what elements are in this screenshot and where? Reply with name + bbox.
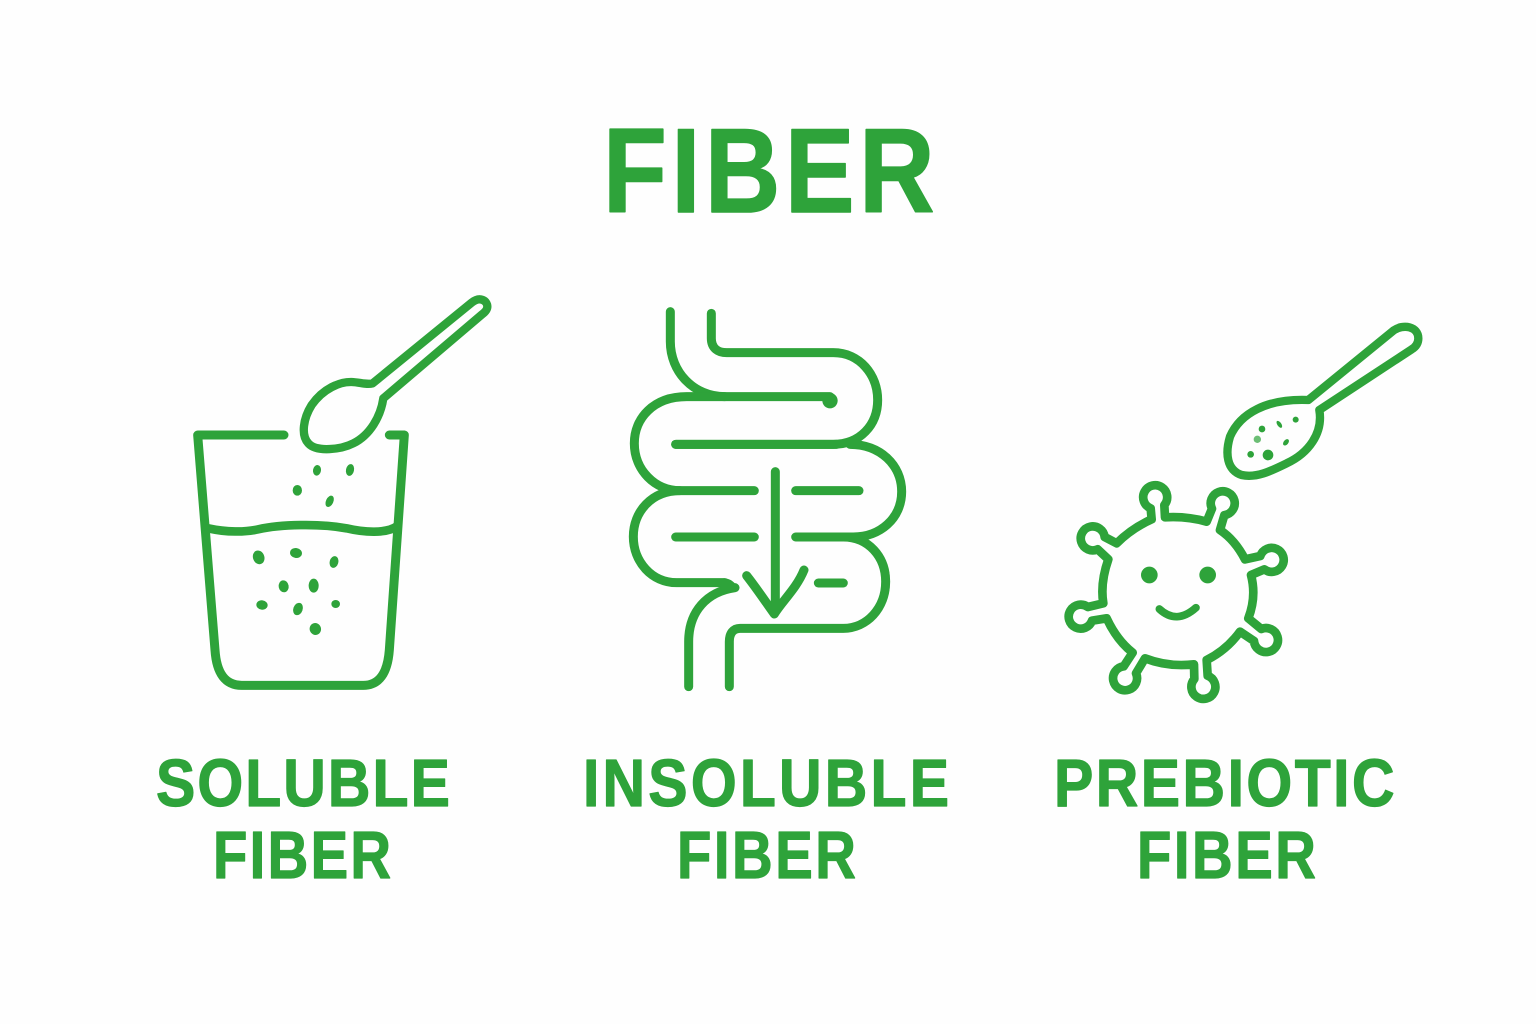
label: insoluble fiber: FIBER <box>677 818 856 893</box>
glass outline <box>198 435 404 685</box>
icon: intestines with downward arrow <box>633 312 902 687</box>
icon: smiling microbe with spoon <box>1069 327 1418 699</box>
intestine loops <box>633 312 902 687</box>
title: FIBER <box>603 103 934 238</box>
label: insoluble fiber: INSOLUBLE <box>583 747 949 821</box>
microbe body with knobs <box>1069 485 1284 699</box>
fold tip <box>723 578 739 590</box>
spoon particles <box>1247 417 1299 460</box>
face <box>1141 567 1216 617</box>
label: soluble fiber: FIBER <box>213 818 391 893</box>
label: prebiotic fiber: PREBIOTIC <box>1054 747 1395 821</box>
label: prebiotic fiber <box>1054 747 1395 893</box>
label: prebiotic fiber: FIBER <box>1137 818 1316 893</box>
label: insoluble fiber <box>583 747 949 893</box>
spoon with particles <box>1227 327 1418 476</box>
label: soluble fiber <box>156 747 450 893</box>
label: soluble fiber: SOLUBLE <box>156 747 450 821</box>
blob end of the loop <box>822 393 838 408</box>
arrow <box>747 472 804 614</box>
spoon <box>304 299 487 449</box>
falling fiber particles <box>251 463 355 637</box>
icon: glass with spoon pouring fiber <box>198 299 487 685</box>
water surface <box>208 525 397 532</box>
